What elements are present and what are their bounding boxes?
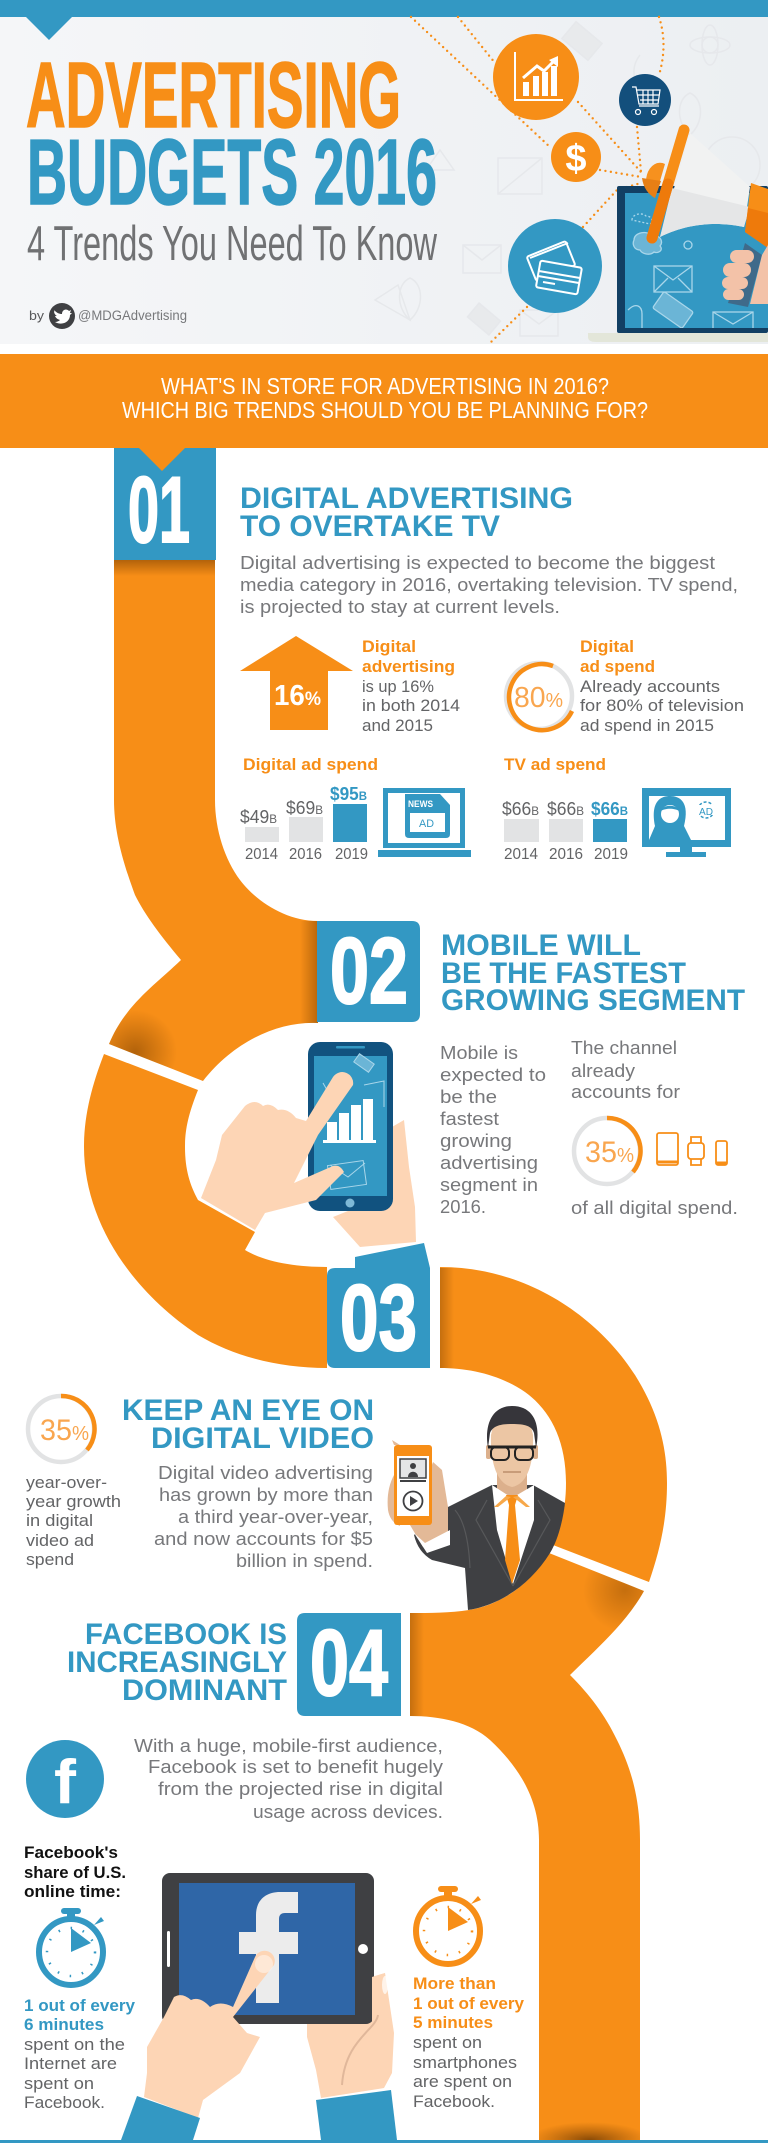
illustration: businessman with phone xyxy=(388,1406,565,1610)
stat text: video growth: spend xyxy=(26,1550,74,1569)
icon: TV with presenter: AD xyxy=(699,807,713,818)
bar chart: TV ad spend: $66B xyxy=(591,799,628,819)
icon: chart circle xyxy=(493,34,579,120)
left sleeve xyxy=(121,2096,200,2140)
stat text: one in five minutes: smartphones xyxy=(413,2053,517,2072)
tie xyxy=(505,1495,520,1584)
stat text: video growth: year-over- xyxy=(26,1473,107,1492)
icon: Facebook circle: f xyxy=(54,1748,76,1817)
ribbon segment 04 to bottom xyxy=(410,1553,644,2143)
right hand xyxy=(307,1973,394,2098)
shirt xyxy=(492,1485,534,1584)
suit xyxy=(414,1485,565,1610)
heading 01: TO OVERTAKE TV xyxy=(240,510,500,543)
right sleeve xyxy=(355,1243,430,1268)
icon: dollar circle: $ xyxy=(565,138,587,180)
stat text: video growth: video ad xyxy=(26,1531,94,1550)
right hand behind phone xyxy=(333,1120,416,1247)
right thumb over tablet xyxy=(372,1973,388,2023)
ring chart 35% xyxy=(28,1396,95,1462)
share of online time label: online time: xyxy=(24,1882,121,1901)
header panel xyxy=(0,0,768,344)
glasses xyxy=(488,1447,536,1460)
icon: devices xyxy=(657,1133,727,1165)
fingers xyxy=(722,250,754,300)
body text 02: Mobile is xyxy=(440,1043,518,1063)
title: BUDGETS 2016 xyxy=(27,120,437,224)
heading 03: KEEP AN EYE ON xyxy=(122,1394,374,1427)
stat text: one in five minutes: More than xyxy=(413,1974,496,1993)
body text 04: Facebook is set to benefit hugely xyxy=(148,1757,443,1777)
megaphone cone xyxy=(660,133,750,237)
body text 03 xyxy=(154,1463,373,1571)
heading 04: FACEBOOK IS xyxy=(85,1618,287,1651)
intro banner: WHAT'S IN STORE FOR ADVERTISING IN 2016? xyxy=(161,373,609,399)
icon: orange stopwatch xyxy=(416,1886,481,1964)
heading 04: INCREASINGLY xyxy=(67,1646,287,1679)
title: ADVERTISING xyxy=(26,43,401,147)
stat text: digital ad spend: ad spend xyxy=(580,657,655,676)
body text 01: media category in 2016, overtaking television. TV spend, xyxy=(240,575,738,595)
stat text: one in five minutes: Facebook. xyxy=(413,2092,495,2111)
stat text: one in six minutes: spent on xyxy=(24,2074,94,2093)
phone screen doodles xyxy=(323,1054,384,1189)
bar chart: TV ad spend: $66B xyxy=(502,799,539,819)
header background xyxy=(0,17,768,344)
stat text: one in six minutes: spent on the xyxy=(24,2035,125,2054)
stat text: digital ad spend: for 80% of television xyxy=(580,696,744,715)
bar chart: TV ad spend: 2016 xyxy=(549,846,583,863)
number badge 01: 01 xyxy=(128,457,190,562)
bar chart: TV ad spend: 2014 xyxy=(504,846,538,863)
icon: laptop with news ad: AD xyxy=(419,818,434,830)
number badge 01 xyxy=(114,448,216,562)
stat text: video growth: in digital xyxy=(26,1511,93,1530)
icon: credit cards circle xyxy=(508,219,602,313)
heading 02: MOBILE WILL xyxy=(441,929,641,962)
stat text: one in six minutes xyxy=(24,1996,136,2112)
phone in hand xyxy=(388,1440,400,1526)
screen doodles xyxy=(628,214,753,332)
bar chart: digital ad spend: $69B xyxy=(286,798,323,818)
left pointing hand xyxy=(201,1072,353,1230)
ribbon segment 01 to 02 xyxy=(109,560,318,1081)
body text 02: be the xyxy=(440,1087,497,1107)
body text 03: and now accounts for $5 xyxy=(154,1529,373,1549)
share of online time label: Facebook's xyxy=(24,1843,118,1862)
stat text: channel share: of all digital spend. xyxy=(571,1198,738,1218)
megaphone back xyxy=(646,163,665,198)
heading 01 xyxy=(240,482,573,543)
bar chart: TV ad spend: TV ad spend xyxy=(504,755,606,774)
stat text: one in six minutes: 6 minutes xyxy=(24,2015,104,2034)
handle xyxy=(728,243,762,307)
body text 02 xyxy=(440,1043,546,1217)
laptop screen xyxy=(617,186,768,333)
ribbon path xyxy=(84,560,667,2143)
ring chart 80% xyxy=(506,663,572,730)
icon: up arrow 16% xyxy=(240,636,353,730)
stat text: one in five minutes: 5 minutes xyxy=(413,2013,493,2032)
icon: laptop with news ad xyxy=(378,790,471,857)
body text 02: expected to xyxy=(440,1065,546,1085)
stat text: channel share: already xyxy=(571,1061,635,1081)
dotted connector lines xyxy=(411,17,664,343)
bar chart: digital ad spend xyxy=(240,755,378,863)
heading 01: DIGITAL ADVERTISING xyxy=(240,482,573,515)
share of online time label xyxy=(24,1843,126,1901)
face xyxy=(491,1422,533,1487)
heading 03: DIGITAL VIDEO xyxy=(151,1422,374,1455)
body text 04: from the projected rise in digital xyxy=(158,1779,443,1799)
heading 04 xyxy=(67,1618,287,1707)
illustration: laptop with megaphone xyxy=(588,130,768,342)
number badge 03: 03 xyxy=(340,1265,417,1370)
number badge 02: 02 xyxy=(330,918,408,1023)
icon: laptop with news ad: NEWS xyxy=(408,799,433,809)
body text 01: is projected to stay at current levels. xyxy=(240,597,560,617)
right sleeve xyxy=(316,2090,397,2140)
stat text: one in six minutes: Facebook. xyxy=(24,2093,105,2112)
body text 04 xyxy=(134,1736,443,1822)
stat text: digital ad spend: ad spend in 2015 xyxy=(580,716,714,735)
illustration: tablet with Facebook xyxy=(121,1873,397,2140)
suit lapels xyxy=(455,1500,550,1586)
byline: by xyxy=(29,308,45,323)
left pointing hand xyxy=(144,1951,275,2118)
icon: Facebook circle xyxy=(26,1740,104,1818)
icon: shopping cart circle xyxy=(619,74,671,126)
stat text: one in six minutes: 1 out of every xyxy=(24,1996,136,2015)
body text 01: Digital advertising is expected to become the biggest xyxy=(240,553,715,573)
stat text: channel share: The channel xyxy=(571,1038,677,1058)
stat text: video growth: year growth xyxy=(26,1492,121,1511)
number badge 04: 04 xyxy=(310,1610,388,1715)
subtitle: 4 Trends You Need To Know xyxy=(27,217,437,271)
stat text: one in five minutes: are spent on xyxy=(413,2072,512,2091)
top blue bar with tab xyxy=(0,0,768,40)
ribbon shadows xyxy=(93,560,667,2140)
stat text: digital ad spend: Already accounts xyxy=(580,677,720,696)
body text 02: segment in xyxy=(440,1175,538,1195)
stat text: digital advertising: is up 16% xyxy=(362,677,434,696)
icon: TV with presenter xyxy=(642,788,731,857)
forearm xyxy=(750,245,768,304)
stat text: digital ad spend xyxy=(580,637,744,735)
ribbon segment 02 to 03 xyxy=(84,1054,327,1368)
intro banner xyxy=(0,354,768,448)
ring chart 35%: 35% xyxy=(585,1136,634,1169)
bar chart: digital ad spend: Digital ad spend xyxy=(243,755,378,774)
bar chart: digital ad spend: $95B xyxy=(330,784,367,804)
body text 01 xyxy=(240,553,738,617)
laptop base xyxy=(588,333,768,342)
title xyxy=(26,43,437,224)
ring chart 35% xyxy=(574,1118,641,1184)
bar chart: digital ad spend: 2014 xyxy=(245,846,278,863)
bar chart: TV ad spend xyxy=(502,755,628,863)
body text 04: usage across devices. xyxy=(253,1802,443,1822)
stat text: one in five minutes: spent on xyxy=(413,2033,482,2052)
Facebook f on tablet xyxy=(239,1892,298,2003)
body text 02: 2016. xyxy=(440,1197,486,1217)
heading 02: GROWING SEGMENT xyxy=(441,984,745,1017)
byline: @MDGAdvertising xyxy=(78,308,187,323)
stat text: channel share xyxy=(571,1038,738,1218)
bar chart: digital ad spend: 2019 xyxy=(335,846,368,863)
share of online time label: share of U.S. xyxy=(24,1863,126,1882)
section 03 xyxy=(26,1265,565,1610)
icon: dollar circle xyxy=(551,132,601,182)
ribbon segment 03 to 04 xyxy=(440,1267,667,1582)
phone xyxy=(308,1042,393,1211)
faint background doodles xyxy=(374,21,718,336)
heading 02 xyxy=(441,929,745,1017)
megaphone mouth xyxy=(745,183,768,248)
body text 02: fastest xyxy=(440,1109,499,1129)
body text 03: Digital video advertising xyxy=(158,1463,373,1483)
tablet body xyxy=(162,1873,374,2024)
bar chart: digital ad spend: 2016 xyxy=(289,846,322,863)
forearm and cuff xyxy=(410,1462,448,1547)
stat text: one in five minutes: 1 out of every xyxy=(413,1994,525,2013)
section 01 xyxy=(114,448,744,863)
stat text: digital advertising xyxy=(362,637,460,735)
heading 04: DOMINANT xyxy=(122,1674,287,1707)
section 04 xyxy=(24,1610,525,2140)
body text 04: With a huge, mobile-first audience, xyxy=(134,1736,443,1756)
stat text: one in five minutes xyxy=(413,1974,525,2111)
body text 03: has grown by more than xyxy=(159,1485,373,1505)
bar chart: TV ad spend: $66B xyxy=(547,799,584,819)
byline xyxy=(29,303,187,329)
bar chart: digital ad spend: $49B xyxy=(240,807,277,827)
neck xyxy=(497,1455,527,1505)
stat text: digital advertising: advertising xyxy=(362,657,455,676)
icon: blue stopwatch xyxy=(39,1908,104,1985)
body text 02: advertising xyxy=(440,1153,538,1173)
intro banner: WHICH BIG TRENDS SHOULD YOU BE PLANNING FOR? xyxy=(122,397,648,423)
bar chart: TV ad spend: 2019 xyxy=(594,846,628,863)
stat text: digital advertising: in both 2014 xyxy=(362,696,460,715)
ring chart 80%: 80% xyxy=(514,682,563,714)
section 02 xyxy=(201,918,745,1268)
ring chart 35%: 35% xyxy=(40,1414,89,1447)
stat text: digital advertising: and 2015 xyxy=(362,716,433,735)
heading 02: BE THE FASTEST xyxy=(441,957,686,990)
hair xyxy=(487,1406,538,1448)
stat text: digital ad spend: Digital xyxy=(580,637,634,656)
stat text: digital advertising: Digital xyxy=(362,637,416,656)
illustration: hands holding phone xyxy=(201,1042,430,1268)
body text 03: billion in spend. xyxy=(236,1551,373,1571)
bottom bar xyxy=(0,2140,768,2143)
body text 02: growing xyxy=(440,1131,512,1151)
icon: up arrow 16%: 16% xyxy=(274,680,321,712)
stat text: one in six minutes: Internet are xyxy=(24,2054,117,2073)
phone bar chart xyxy=(323,1099,376,1143)
stat text: video growth xyxy=(26,1473,121,1569)
megaphone rim xyxy=(652,130,684,238)
body text 03: a third year-over-year, xyxy=(178,1507,373,1527)
heading 03 xyxy=(122,1394,374,1455)
stat text: channel share: accounts for xyxy=(571,1082,680,1102)
